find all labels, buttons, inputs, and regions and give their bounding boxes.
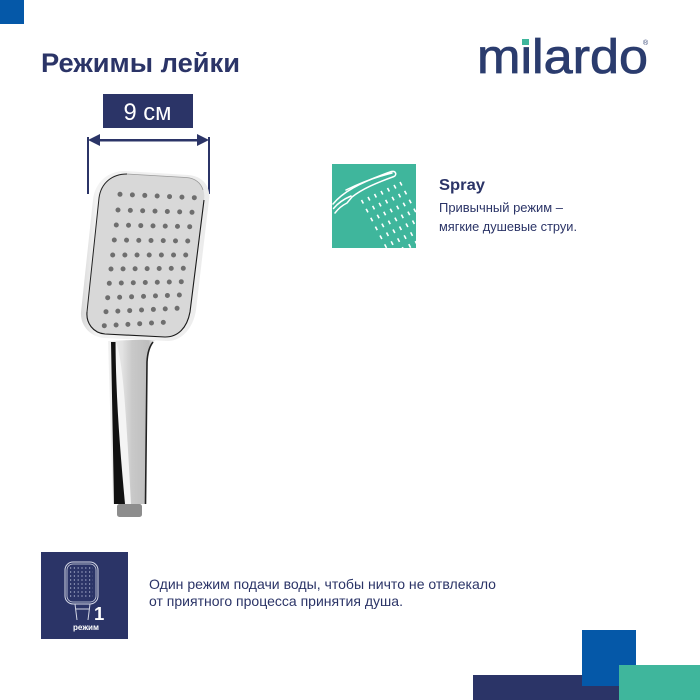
width label: 9 см	[103, 94, 193, 128]
mode description: Привычный режим –	[439, 200, 564, 215]
shower outline	[333, 171, 396, 213]
threaded nut	[117, 504, 142, 517]
icon: one mode: режим	[73, 622, 99, 632]
icon: one mode	[41, 552, 128, 639]
head rim	[81, 171, 209, 341]
width label: 9 см: 9 см	[124, 99, 172, 126]
mode name: Spray: Spray	[439, 177, 485, 194]
shower head product	[81, 171, 209, 517]
icon: spray mode	[332, 164, 416, 248]
face edges	[87, 174, 204, 337]
mode description: мягкие душевые струи.	[439, 219, 577, 234]
water jets	[360, 182, 416, 248]
handle	[108, 339, 156, 504]
spray nozzles	[104, 194, 194, 326]
description text	[149, 576, 496, 609]
mode description	[439, 200, 577, 234]
description text: от приятного процесса принятия душа.	[149, 593, 403, 609]
corner blocks	[473, 630, 700, 700]
icon: one mode: 1	[94, 603, 104, 624]
dimension arrow	[87, 134, 210, 194]
title: Режимы лейки	[41, 48, 240, 78]
logo: milardo: milardo	[477, 31, 648, 84]
corner square	[0, 0, 24, 24]
description text: Один режим подачи воды, чтобы ничто не отвлекало	[149, 576, 496, 592]
logo: milardo: ®	[643, 39, 649, 47]
head face	[87, 174, 204, 337]
